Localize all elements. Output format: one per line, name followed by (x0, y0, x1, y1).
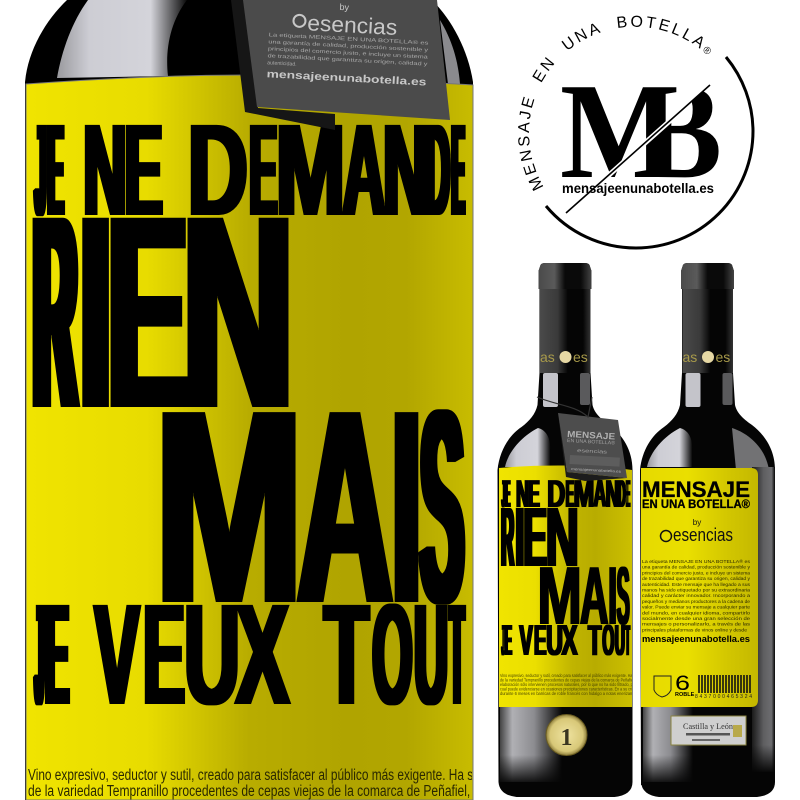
front headline: E (505, 617, 512, 665)
headline text: U (184, 574, 240, 735)
hanging tag: una garantía de calidad, producción sostenible y (268, 39, 429, 54)
headline text: O (372, 574, 412, 735)
back label (641, 468, 758, 707)
wine description: de la variedad Tempranillo procedentes de cepas viejas de la comarca de Peñafiel, en (28, 783, 487, 800)
front headline: J (502, 617, 504, 665)
lower highlight (500, 707, 562, 782)
hanging tag: esencias (307, 10, 398, 40)
front headline: N (516, 473, 529, 516)
hanging tag: de trazabilidad que garantiza su origen, calidad y (267, 53, 428, 68)
logo ring (546, 57, 753, 248)
hanging tag: by (339, 2, 350, 12)
neck foil (540, 289, 590, 373)
front description: de la variedad Tempranillo procedentes de cepas viejas de la comarca de Peñafiel, en (500, 678, 640, 682)
six months: 6 (675, 672, 690, 695)
headline text: E (124, 96, 163, 243)
bottle highlight (57, 0, 187, 78)
capsule brand: as (682, 349, 697, 365)
front headline: J (502, 473, 505, 516)
MB monogram: B (640, 55, 722, 207)
headline text: E (108, 159, 188, 466)
headline text: X (236, 574, 290, 735)
headline text: I (391, 353, 422, 661)
back paragraph: de trazabilidad que garantiza su origen, calidad y (642, 576, 751, 581)
front headline: E (528, 473, 540, 516)
headline text: A (342, 96, 386, 243)
front description: elaboración sólo intervienen procesos naturales, por lo que no ha sido filtrado, por lo (500, 682, 640, 687)
logo url: mensajeenunabotella.es (562, 180, 714, 196)
left shoulder shine (647, 428, 692, 467)
headline text: A (297, 353, 393, 661)
front headline: M (537, 549, 582, 642)
front headline: A (580, 549, 609, 642)
front headline: E (534, 617, 546, 665)
back paragraph: manos ha sido etiquetado por su extraordinaria (642, 588, 750, 592)
back paragraph: principios del comercio justo, e incluye un sistema (642, 570, 750, 575)
capsule (538, 263, 592, 289)
front headline: I (515, 490, 525, 584)
wine description (28, 767, 489, 800)
text: S (617, 549, 630, 642)
back paragraph: socialmente desde una gran selección de (642, 616, 750, 621)
front headline: N (606, 473, 619, 516)
headline text: T (324, 574, 369, 735)
neck highlights (543, 373, 590, 407)
lower fade (499, 755, 569, 785)
headline text (34, 96, 464, 735)
back paragraph: calidad y carácter innovador. Incorporando a (642, 593, 750, 598)
capsule brand (682, 349, 730, 365)
headline text: E (45, 574, 69, 735)
hanging tag: mensajeenunabotella.es (266, 68, 427, 89)
front bottle: T (626, 617, 630, 665)
back paragraph: valor. Puede enviar su mensaje a cualquier parte (642, 605, 750, 610)
front headline: N (546, 490, 579, 584)
capsule brand: es (573, 349, 588, 365)
bottle body (498, 263, 632, 797)
headline text: N (83, 96, 127, 243)
neck foil (682, 289, 733, 373)
neck highlights (686, 373, 732, 407)
shoulder highlight (505, 428, 550, 467)
right edge shine (752, 467, 775, 772)
back paragraph (642, 558, 751, 632)
monogram slash (566, 85, 710, 213)
Castilla y Leon sticker: Castilla y León (683, 722, 733, 731)
headline text: M (276, 96, 345, 243)
right edge fade (750, 745, 775, 773)
front bottle: U (615, 617, 625, 665)
capsule brand (540, 349, 588, 365)
headline text: N (182, 159, 294, 466)
right glass highlight (440, 20, 460, 84)
front description: cual puede evidenciarse en ocasiones precipitaciones características. En a su crianza (500, 686, 640, 692)
hanging tag: La etiqueta MENSAJE EN UNA BOTELLA® es (269, 31, 429, 47)
back url: mensajeenunabotella.es (642, 634, 750, 645)
lower fade (641, 755, 701, 785)
gold medal: 1 (560, 725, 572, 751)
bottle glass (25, 0, 473, 800)
Castilla y Leon sticker (671, 716, 746, 745)
back paragraph: del mundo, en cualquier idioma, compartirlo (642, 610, 750, 615)
back paragraph: La etiqueta MENSAJE EN UNA BOTELLA® es (642, 558, 751, 564)
hanging tag (231, 0, 450, 130)
small tag: mensajeenunabotella.es (571, 467, 621, 474)
front headline: A (594, 473, 606, 516)
origin seal (654, 676, 671, 697)
by esencias (660, 518, 733, 545)
small tag: esencias (577, 448, 608, 456)
bottle body (640, 263, 775, 797)
lower highlight (643, 707, 693, 782)
front headline: V (519, 617, 533, 665)
capsule (681, 263, 734, 289)
headline text: E (143, 574, 185, 735)
small tag (537, 397, 627, 481)
front headline: E (506, 473, 510, 516)
headline text: R (34, 159, 77, 466)
small tag: MENSAJE (567, 429, 615, 442)
back paragraph: mensajes o personalizarlo, a través de las (642, 622, 751, 627)
text: S (420, 353, 464, 661)
back paragraph: autenticidad. Este mensaje que ha llegado a sus (642, 582, 751, 587)
by esencias: by (693, 518, 701, 527)
headline text: J (35, 96, 46, 243)
headline text: E (48, 96, 64, 243)
hanging tag: autenticidad. (267, 60, 297, 68)
text: T (450, 574, 464, 735)
back bottle (640, 263, 775, 797)
small tag: EN UNA BOTELLA® (567, 437, 616, 447)
headline text: V (94, 574, 140, 735)
front bottle: D (618, 473, 626, 516)
large bottle close-up: U (414, 574, 448, 735)
front headline: U (546, 617, 563, 665)
front headline: T (588, 617, 602, 665)
barcode (695, 675, 752, 700)
circular logo (518, 16, 754, 250)
front headline: M (574, 473, 594, 516)
back label heading: EN UNA BOTELLA® (642, 499, 751, 511)
front headline: O (602, 617, 614, 665)
front headline: R (501, 490, 514, 584)
headline text: I (80, 159, 112, 466)
right shoulder shine (732, 428, 769, 470)
back label heading: MENSAJE (642, 477, 750, 502)
headline text: M (154, 353, 304, 661)
barcode: 8437000465324 (695, 694, 752, 700)
gold medal (546, 714, 587, 756)
wine description: Vino expresivo, seductor y sutil, creado para satisfacer al público más exigente. Ha sido (28, 767, 489, 784)
headline text: E (250, 96, 277, 243)
capsule brand: es (716, 349, 730, 365)
text: E (452, 96, 464, 243)
capsule brand: as (540, 349, 555, 365)
back paragraph: pequeños y medianos productores a la cadena de (642, 599, 750, 604)
large bottle close-up (25, 0, 489, 800)
back paragraph: principales plataformas de vinos online y desde (642, 627, 747, 632)
front headline: X (562, 617, 578, 665)
by esencias: esencias (673, 525, 733, 545)
front headline: I (608, 549, 617, 642)
front headline (501, 473, 630, 665)
back paragraph: una garantía de calidad, producción sostenible y (642, 565, 751, 570)
large bottle close-up: D (425, 96, 450, 243)
front description (500, 673, 640, 696)
front description: Vino expresivo, seductor y sutil, creado para satisfacer al público más exigente. Ha sido (500, 673, 640, 678)
front description: durante 6 meses en barricas de roble francés con hidalgo a notas enerizam, ap (500, 691, 640, 696)
MB monogram: M (560, 55, 680, 207)
front headline: E (566, 473, 574, 516)
headline text: D (188, 96, 248, 243)
large yellow label (26, 75, 473, 800)
front bottle (498, 263, 640, 797)
front headline: D (547, 473, 565, 516)
six months (675, 672, 695, 698)
front label (499, 466, 632, 707)
headline text: N (383, 96, 429, 243)
front headline: E (523, 490, 547, 584)
six months: ROBLE (675, 692, 695, 698)
front bottle: E (626, 473, 630, 516)
MB monogram (562, 87, 719, 178)
headline text: J (35, 574, 44, 735)
hanging tag: principios del comercio justo, e incluye un sistema (268, 46, 428, 61)
ring text: MENSAJE EN UNA BOTELLA® (518, 16, 711, 191)
